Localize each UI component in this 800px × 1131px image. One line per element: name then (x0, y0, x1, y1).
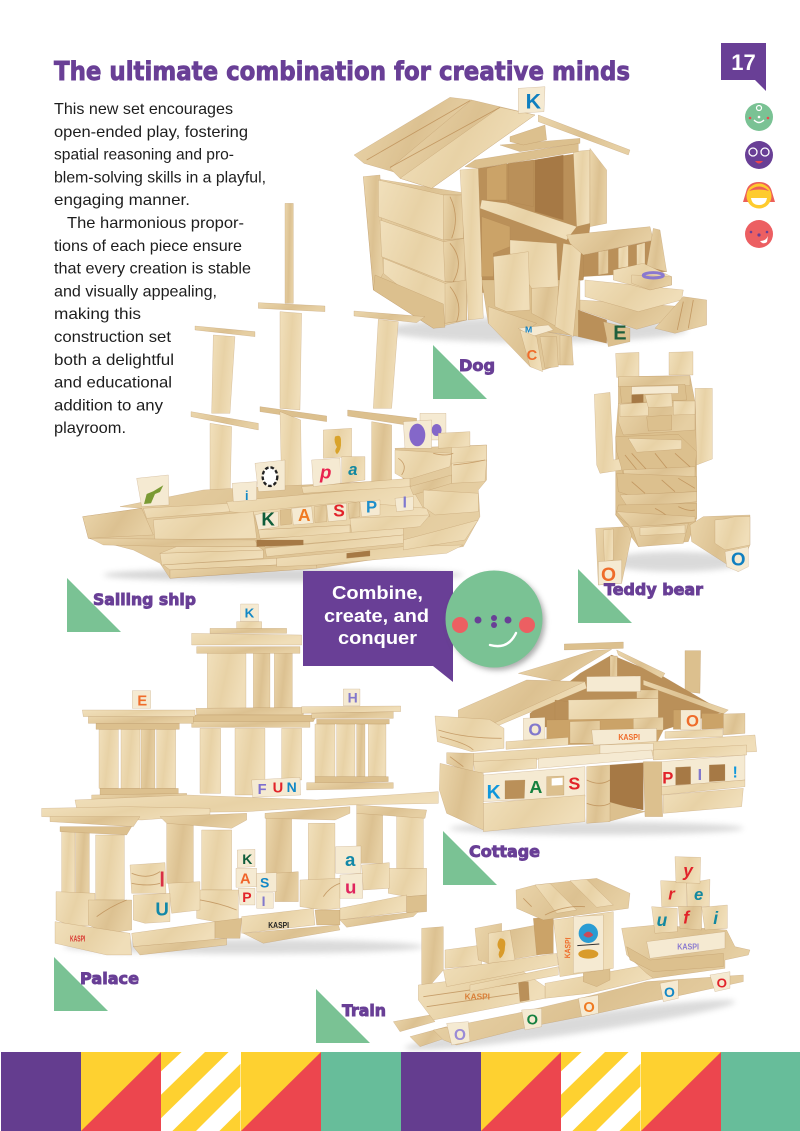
model: dog: E (613, 322, 627, 344)
intro text block: and educational (54, 375, 172, 392)
model: cottage: P (662, 768, 673, 787)
model: palace: P (242, 889, 252, 905)
model: palace: N (287, 779, 297, 795)
model: palace: F (258, 782, 267, 798)
icon: red face (745, 220, 773, 248)
model: dog: M (525, 324, 532, 334)
model: train: O (527, 1013, 538, 1029)
model: palace: E (137, 693, 147, 709)
model: palace: H (348, 690, 358, 706)
intro text block: spatial reasoning and pro- (54, 147, 234, 164)
label: sailing ship (67, 578, 196, 632)
label: sailing ship: Sailing ship (93, 590, 196, 609)
label: palace: Palace (80, 969, 139, 988)
model: train: O (454, 1027, 466, 1044)
model: palace: K (245, 606, 255, 621)
model: train: O (664, 984, 675, 1000)
model: train: e (694, 885, 703, 904)
model: palace: KASPI (70, 933, 85, 943)
label: train (316, 989, 386, 1043)
model: cottage: O (686, 711, 699, 730)
model: palace: U (273, 781, 283, 797)
model: sailing ship (83, 203, 487, 582)
model: sailing ship: K (261, 509, 275, 530)
page number tab: 17 (731, 50, 756, 75)
intro text block: engaging manner. (54, 192, 190, 209)
icon: large smiling face (446, 570, 545, 670)
model: train: r (668, 884, 676, 903)
intro text block: and visually appealing, (54, 283, 217, 300)
label: train: Train (342, 1001, 386, 1020)
intro text block: blem-solving skills in a playful, (54, 169, 266, 186)
intro text block: The harmonious propor- (67, 215, 244, 232)
model: palace: U (155, 899, 169, 920)
label: cottage: Cottage (469, 842, 540, 861)
model: train: u (657, 910, 668, 930)
footer colour band (1, 1052, 800, 1131)
intro text block: construction set (54, 329, 172, 346)
model: palace: a (345, 849, 356, 870)
model: train: f (683, 907, 691, 927)
model: sailing ship: S (333, 501, 345, 521)
model: sailing ship: A (298, 505, 311, 525)
model: palace: A (240, 871, 251, 887)
icon: yellow face with red hair (743, 182, 775, 208)
callout: speech bubble: conquer (338, 628, 417, 648)
intro text block: playroom. (54, 420, 126, 437)
intro text block: tions of each piece ensure (54, 238, 242, 255)
model: cottage: KASPI (618, 732, 640, 742)
intro text block: that every creation is stable (54, 261, 251, 278)
callout: speech bubble: create, and (324, 606, 429, 626)
model: palace: I (262, 893, 266, 909)
intro text block: making this (54, 306, 141, 323)
model: train: KASPI (677, 942, 699, 951)
model: teddy bear (594, 352, 750, 586)
model: sailing ship: I (403, 494, 407, 511)
model: palace: l (159, 870, 165, 892)
label: teddy bear (578, 569, 703, 623)
model: train: y (682, 861, 694, 881)
intro text block: open-ended play, fostering (54, 124, 248, 141)
icon: purple face with glasses (745, 141, 773, 169)
model: cottage: ! (733, 765, 738, 782)
model: cottage: A (529, 777, 542, 797)
model: dog (354, 87, 707, 372)
model: dog: C (527, 348, 538, 364)
model: sailing ship: P (366, 498, 377, 517)
model: train: KASPI (465, 991, 490, 1001)
model: teddy bear: O (601, 565, 616, 586)
intro text block (54, 101, 266, 437)
label: dog (433, 345, 495, 399)
callout: speech bubble: Combine, (332, 583, 423, 603)
model: train: O (717, 975, 727, 990)
intro text block: both a delightful (54, 352, 174, 369)
label: cottage (443, 831, 540, 885)
model: cottage: K (487, 783, 501, 804)
label: dog: Dog (459, 356, 495, 375)
label: palace (54, 957, 139, 1011)
model: cottage: S (568, 773, 580, 793)
model: cottage (435, 642, 757, 835)
title: The ultimate combination for creative minds (54, 57, 630, 87)
model: sailing ship: p (319, 461, 331, 482)
model: palace (42, 604, 438, 955)
callout: speech bubble (303, 571, 453, 682)
model: train (393, 857, 750, 1057)
model: palace: u (345, 876, 356, 897)
label: teddy bear: Teddy bear (604, 580, 703, 599)
model: train: O (583, 1000, 595, 1016)
model: cottage: O (528, 720, 542, 740)
model: palace: K (242, 851, 252, 867)
model: palace: S (260, 874, 269, 890)
model: train: i (713, 908, 719, 928)
model: cottage: I (698, 767, 702, 784)
model: dog: K (526, 90, 542, 114)
intro text block: This new set encourages (54, 101, 233, 118)
icon: green face (745, 103, 773, 131)
model: teddy bear: O (731, 549, 746, 570)
model: sailing ship: i (245, 489, 249, 503)
model: sailing ship: a (348, 460, 358, 479)
intro text block: addition to any (54, 397, 163, 414)
page number tab (721, 43, 766, 91)
model: train: KASPI (563, 937, 573, 958)
model: palace: KASPI (268, 921, 289, 930)
